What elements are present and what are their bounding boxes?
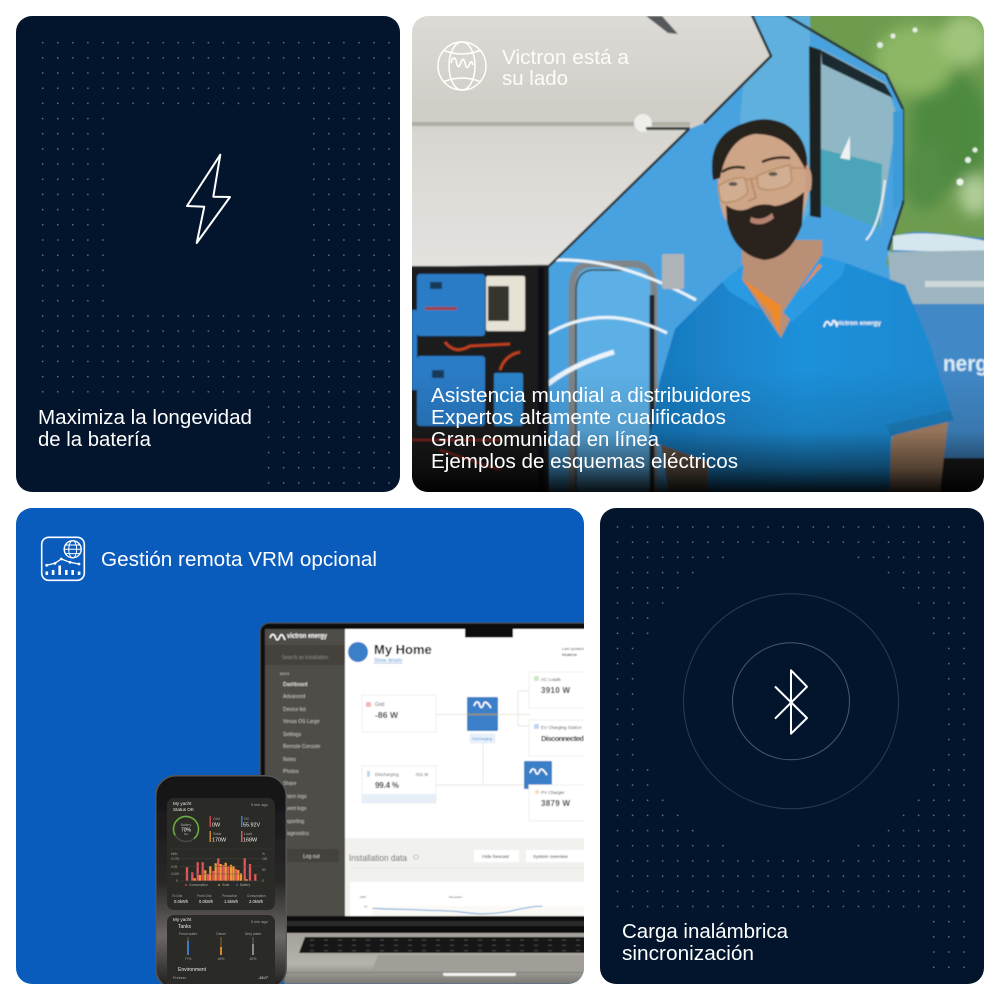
card: PV Charger: 3879 W [541, 799, 570, 808]
card: AC Loads: AC Loads [541, 677, 562, 682]
installation data section: 20 [364, 904, 368, 908]
laptop dashboard: Realtime [562, 653, 577, 657]
laptop dashboard [345, 628, 599, 917]
phone card: status: 100 [262, 857, 268, 861]
card: Battery [362, 766, 436, 803]
phone card: status: 5 min ago [251, 803, 268, 807]
card: Grid: Grid [375, 702, 385, 708]
card: AC Loads [528, 672, 584, 708]
icon: globe with Victron logo [438, 42, 486, 90]
text: battery longevity [38, 409, 251, 446]
door frame [572, 264, 654, 510]
phone card: status: Consumption [247, 894, 266, 898]
card: Grid: -86 W [375, 710, 399, 720]
card: EV Charging [528, 720, 584, 756]
man: head [716, 132, 810, 222]
phone card: status: 50 [262, 868, 266, 872]
phone card: status: % [262, 852, 265, 856]
man: arms [890, 421, 949, 492]
van body [770, 16, 903, 271]
inverter box [467, 697, 498, 731]
laptop dashboard: Last updated [562, 647, 584, 651]
car lettering: nerg [943, 351, 988, 376]
man: polo shirt [649, 262, 952, 492]
installation data section: Recorded [449, 895, 462, 899]
installation data section [345, 838, 590, 917]
heading: Victron at your side [502, 48, 629, 85]
installation data section: System overview [533, 854, 568, 859]
photo: technician by camper van [412, 16, 984, 492]
phone card: tanks [167, 915, 275, 995]
phone card: status: Load [244, 832, 252, 836]
laptop sidebar: Settings [283, 732, 302, 738]
laptop sidebar: victron energy [287, 633, 327, 640]
text: support list: Asistencia mundial a distribuidores [431, 385, 751, 407]
phone card: status: 0.0kWh [174, 899, 189, 904]
phone card: status: Status OK [173, 807, 195, 812]
laptop bezel [259, 622, 584, 775]
text: wireless sync: sincronización [622, 943, 754, 965]
phone card: status: 0 [176, 879, 178, 883]
heading: Victron at your side: su lado [502, 68, 568, 90]
heading: Victron at your side: Victron está a [502, 47, 630, 69]
card: Battery: Discharging [375, 772, 399, 777]
icon: lightning bolt [187, 155, 230, 243]
phone body [155, 775, 287, 990]
phone card: tanks: Environment [178, 967, 207, 973]
phone card: status: To Grid [172, 894, 182, 898]
phone card: status: Idle [184, 832, 189, 836]
phone card: status: 0.075 [171, 857, 179, 861]
laptop sidebar: Share [283, 781, 297, 787]
text: wireless sync: Carga inalámbrica [622, 921, 789, 943]
panel: battery longevity [16, 16, 400, 492]
text: support list: Ejemplos de esquemas eléctricos [431, 451, 738, 473]
van curves [543, 260, 696, 388]
car behind [892, 230, 984, 458]
laptop sidebar: Event logs [283, 806, 307, 812]
phone card: status: 0.05 [171, 865, 177, 869]
equipment compartment [412, 265, 550, 492]
laptop sidebar: Exporting [283, 819, 304, 825]
text: wireless sync [622, 921, 789, 965]
laptop sidebar: Diagnostics [283, 831, 309, 837]
phone card: tanks: Fresh water [179, 932, 198, 936]
heading: VRM: Gestión remota VRM opcional [101, 549, 377, 571]
phone card: tanks: Grey water [245, 932, 262, 936]
phone card: tanks: Tanks [178, 924, 192, 930]
laptop sidebar [265, 629, 345, 917]
shirt logo: victron energy [836, 320, 881, 327]
phone card: tanks: Freezer [173, 976, 187, 980]
wireless rings [684, 594, 898, 809]
card: Grid [362, 695, 436, 732]
phone card: status: From Grid [197, 894, 212, 898]
card: Battery: 99.4 % [375, 781, 399, 790]
phone card: status: Consumption [189, 883, 208, 887]
trees [780, 16, 984, 268]
card: EV Charging: EV Charging Station [541, 725, 582, 730]
card: PV Charger: PV Charger [541, 790, 565, 795]
installation data section: Installation data [349, 853, 408, 864]
man: glasses [718, 165, 805, 202]
phone card: status: 70% [181, 828, 192, 834]
phone chart [187, 858, 255, 881]
laptop sidebar: BACK [280, 672, 290, 676]
laptop sidebar: Search an installation [282, 655, 328, 661]
laptop sidebar: Venus OS Large [283, 719, 320, 725]
chip: Discharging: Discharging [472, 737, 492, 741]
laptop sidebar: Dashboard [283, 682, 308, 688]
phone card: status: kWh [171, 852, 178, 856]
card: PV Charger [529, 785, 599, 821]
phone card: status: 0W [212, 822, 221, 828]
phone card: status [167, 798, 275, 910]
phone card: tanks: Diesel [216, 932, 226, 936]
phone card: status: 168W [243, 838, 258, 844]
card: Battery: -511 W [415, 772, 428, 777]
card: AC Loads: 3910 W [541, 686, 570, 695]
phone card: status: 0.025 [171, 872, 179, 876]
laptop dashboard: Show details [374, 658, 403, 664]
text: battery longevity: de la batería [38, 429, 152, 451]
laptop sidebar: Photos [283, 769, 299, 775]
phone card: status: Battery [240, 883, 251, 887]
installation data section: Hide forecast [482, 854, 510, 859]
phone card: status: Production [222, 894, 237, 898]
phone card: tanks: -18.0° [258, 976, 269, 980]
phone card: tanks: 77% [185, 957, 191, 961]
text: support list: Expertos altamente cualificados [431, 407, 726, 429]
phone card: tanks: 5 min ago [251, 920, 268, 924]
phone card: status: 2.0kWh [249, 899, 264, 904]
van window [817, 49, 897, 229]
laptop sidebar: Remote Console [283, 744, 320, 750]
phone card: status: 1.5kWh [224, 899, 239, 904]
text: support list: Gran comunidad en línea [431, 429, 660, 451]
phone card: tanks: 62% [250, 957, 256, 961]
phone card: status: 0.0kWh [199, 899, 214, 904]
text: battery longevity: Maximiza la longevidad [38, 407, 252, 429]
phone card: status: 0 [262, 879, 264, 883]
vent [662, 254, 684, 289]
card: EV Charging: Disconnected [541, 734, 584, 743]
phone card: status: Solar [213, 832, 222, 836]
laptop sidebar: Advanced [283, 694, 305, 700]
laptop dashboard: My Home [374, 642, 432, 657]
laptop sidebar: Alarm logs [283, 794, 307, 800]
chip: Discharging [470, 734, 495, 743]
phone card: status: Battery [181, 823, 192, 827]
phone card: tanks: My yacht [173, 917, 192, 922]
phone card: status: 170W [212, 838, 227, 844]
icon: VRM globe and chart [42, 537, 84, 580]
panel: wireless sync [600, 508, 984, 984]
inverter box 2 [524, 761, 552, 789]
phone card: status: Grid [213, 817, 220, 821]
phone card: status: 55.92V [243, 822, 260, 828]
installation data section: kWh [360, 895, 366, 899]
panel: Victron at your side photo [412, 16, 984, 492]
man: neck [742, 240, 822, 340]
phone card: tanks: 45% [218, 957, 224, 961]
bottom gradient [412, 389, 984, 492]
camper door panel [400, 0, 771, 266]
laptop [260, 623, 600, 984]
panel: VRM remote management [16, 508, 600, 995]
man: eyes and brows [722, 158, 790, 201]
laptop sidebar: Notes [283, 757, 297, 763]
phone card: status: My yacht [173, 801, 192, 806]
phone [155, 775, 287, 995]
laptop base [284, 916, 600, 984]
phone card: status: DC [244, 817, 250, 821]
icon: Bluetooth [775, 670, 807, 734]
laptop sidebar: Log out [303, 854, 320, 860]
phone card: status: Solar [222, 883, 230, 887]
laptop sidebar: Device list [283, 707, 306, 713]
text: support list [431, 385, 751, 473]
